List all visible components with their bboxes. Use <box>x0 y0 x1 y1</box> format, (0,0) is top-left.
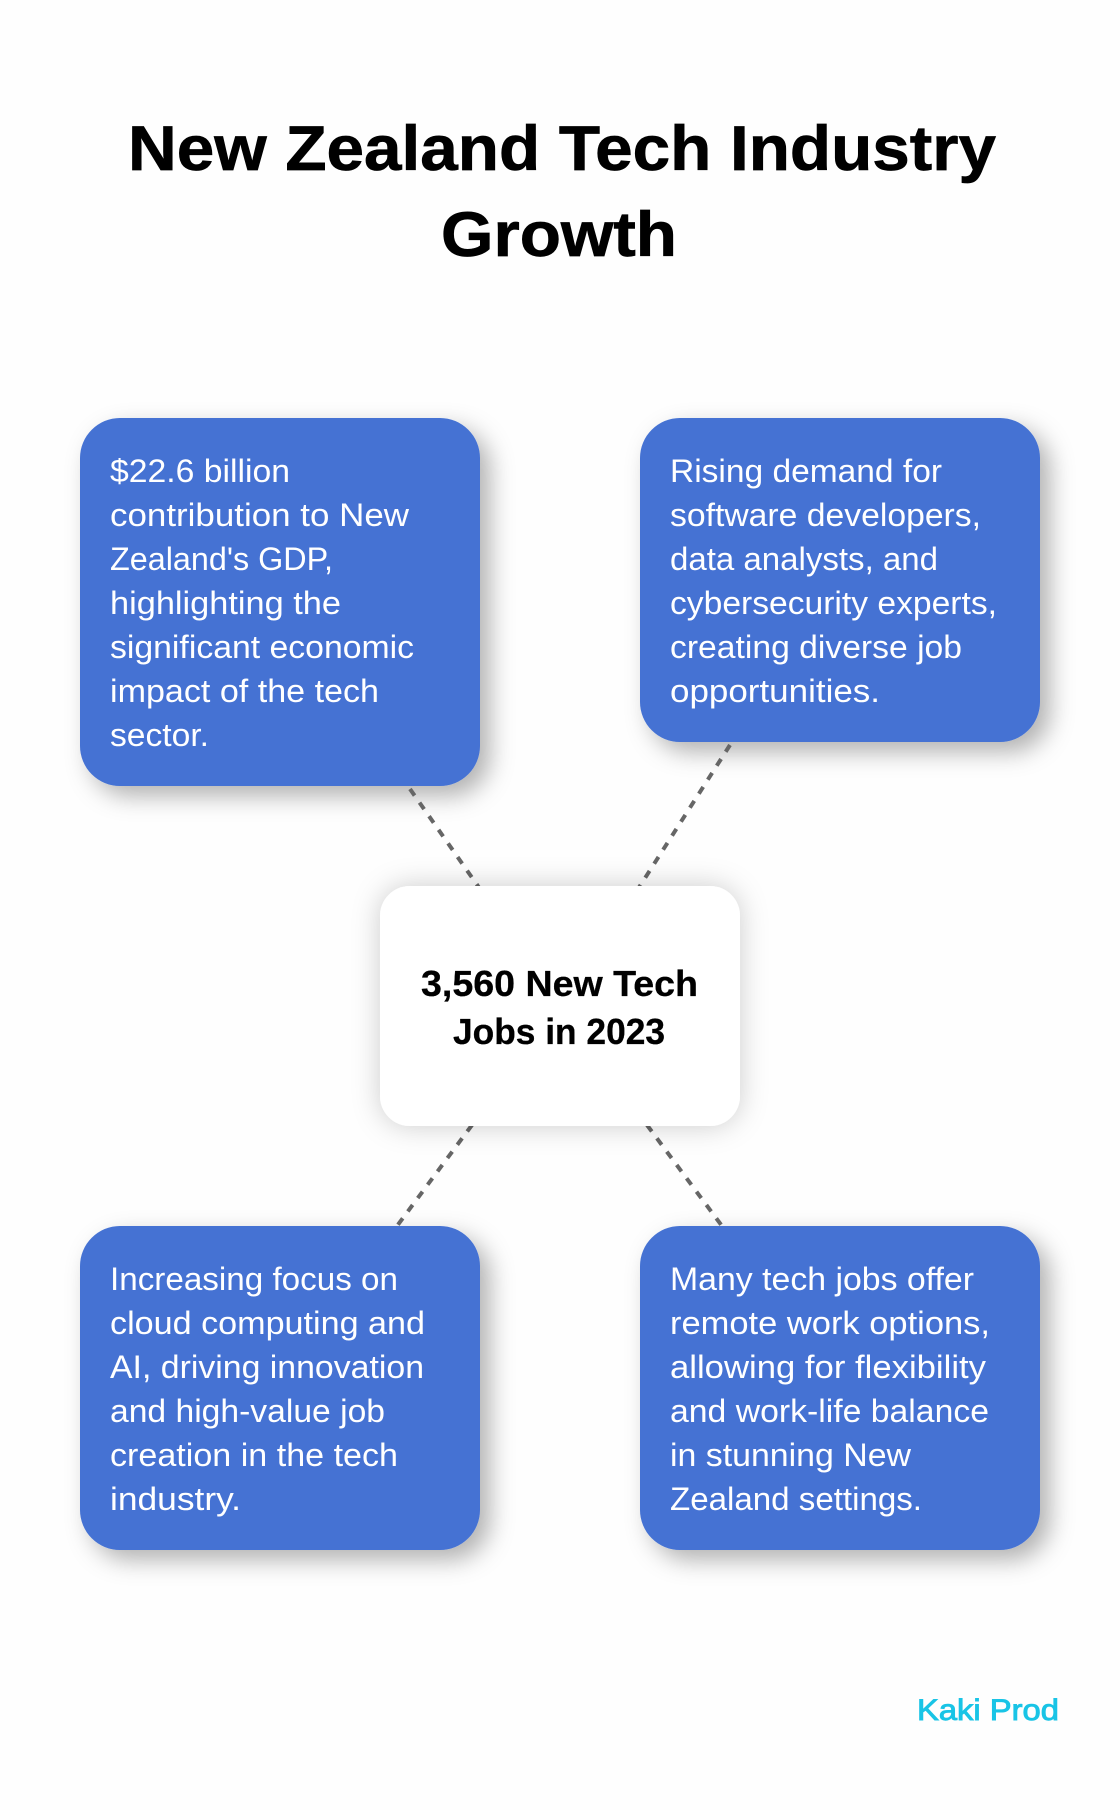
panel: cloud and AI: industry. <box>110 1481 241 1517</box>
panel: central stat <box>380 886 740 1126</box>
panel: remote work: in stunning New <box>670 1437 912 1473</box>
panel: remote work: allowing for flexibility <box>670 1349 986 1385</box>
logo: Kaki Prod: Kaki Prod <box>917 1694 1059 1727</box>
title: New Zealand Tech Industry <box>128 114 996 184</box>
connector lines <box>397 745 730 1226</box>
panel: job demand: Rising demand for <box>670 453 942 489</box>
panel: central stat: 3,560 New Tech <box>421 963 698 1004</box>
panel: remote work <box>640 1226 1040 1550</box>
title: Growth <box>441 200 677 270</box>
panel: job demand: software developers, <box>670 497 981 533</box>
panel: GDP contribution: $22.6 billion <box>110 453 290 489</box>
panel: GDP contribution: contribution to New <box>110 497 410 533</box>
panel: central stat: Jobs in 2023 <box>453 1011 665 1052</box>
title <box>128 114 996 270</box>
panel: GDP contribution <box>80 418 480 786</box>
panel: cloud and AI: cloud computing and <box>110 1305 425 1341</box>
panel: job demand: opportunities. <box>670 673 880 709</box>
panel: cloud and AI: creation in the tech <box>110 1437 398 1473</box>
panel: GDP contribution: significant economic <box>110 629 414 665</box>
panel: job demand <box>640 418 1040 742</box>
panel: remote work: Many tech jobs offer <box>670 1261 974 1297</box>
panel: cloud and AI: and high-value job <box>110 1393 385 1429</box>
panel: GDP contribution: sector. <box>110 717 209 753</box>
panel: job demand: data analysts, and <box>670 541 938 577</box>
panel: cloud and AI: AI, driving innovation <box>110 1349 424 1385</box>
panel: job demand: creating diverse job <box>670 629 962 665</box>
panel: remote work: and work-life balance <box>670 1393 989 1429</box>
panel: remote work: remote work options, <box>670 1305 990 1341</box>
panel: GDP contribution: highlighting the <box>110 585 341 621</box>
panel: job demand: cybersecurity experts, <box>670 585 997 621</box>
panel: cloud and AI: Increasing focus on <box>110 1261 398 1297</box>
panel: cloud and AI <box>80 1226 480 1550</box>
panel: GDP contribution: impact of the tech <box>110 673 379 709</box>
panel: remote work: Zealand settings. <box>670 1481 922 1517</box>
panel: GDP contribution: Zealand's GDP, <box>110 541 333 577</box>
